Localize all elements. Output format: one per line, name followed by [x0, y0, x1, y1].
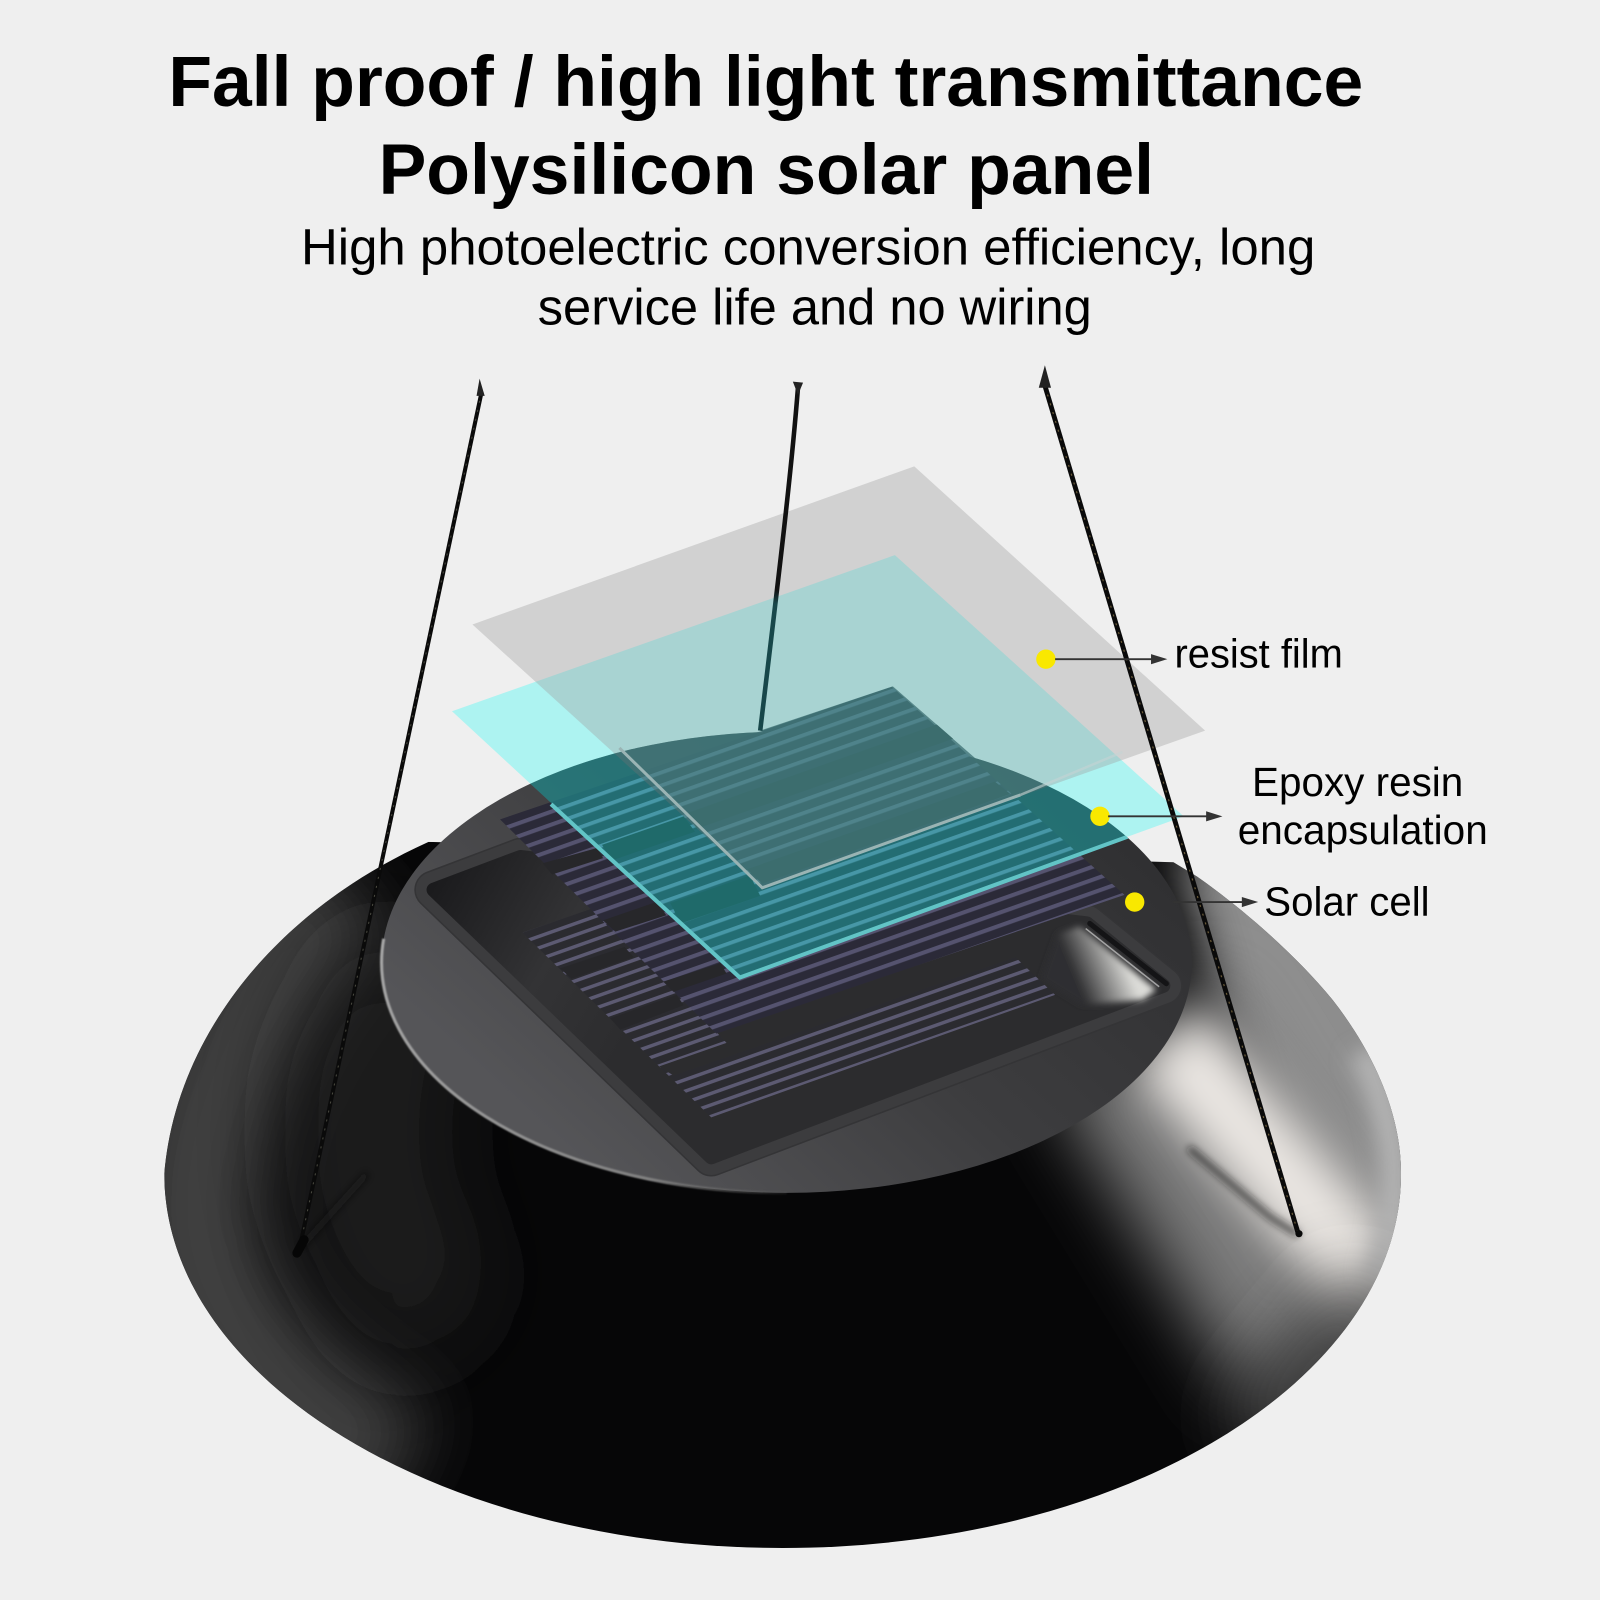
callout: epoxy resin encapsulation: Epoxy resin: [1252, 759, 1463, 805]
title: Polysilicon solar panel: [379, 130, 1154, 210]
title: [168, 42, 1363, 210]
subtitle: [301, 218, 1315, 335]
callout: epoxy resin encapsulation: encapsulation: [1238, 807, 1488, 853]
solar cell upper stripes: [500, 687, 1124, 1034]
solar cell lower stripes: [522, 906, 1055, 1117]
lamp body: [143, 687, 1429, 1571]
top disc: [382, 732, 1192, 1193]
callout: solar cell: Solar cell: [1264, 878, 1430, 924]
disc rim highlight: [382, 939, 787, 1193]
resist film layer: [472, 466, 1205, 890]
callout: solar cell: [1125, 878, 1430, 924]
middle hanging wire: [760, 382, 803, 731]
subtitle: service life and no wiring: [538, 278, 1092, 335]
subtitle: High photoelectric conversion efficiency, long: [301, 218, 1315, 275]
epoxy resin layer: [452, 555, 1182, 980]
title: Fall proof / high light transmittance: [168, 42, 1363, 122]
callout: resist film: [1036, 630, 1343, 676]
callout: epoxy resin encapsulation: [1090, 759, 1488, 853]
recessed panel bay: [434, 857, 1163, 1157]
slot highlight: [1041, 923, 1166, 1005]
callout: resist film: resist film: [1174, 630, 1343, 676]
left hanging wire: [297, 379, 485, 1253]
cone base: [143, 816, 1429, 1571]
right hanging wire: [1039, 365, 1303, 1237]
